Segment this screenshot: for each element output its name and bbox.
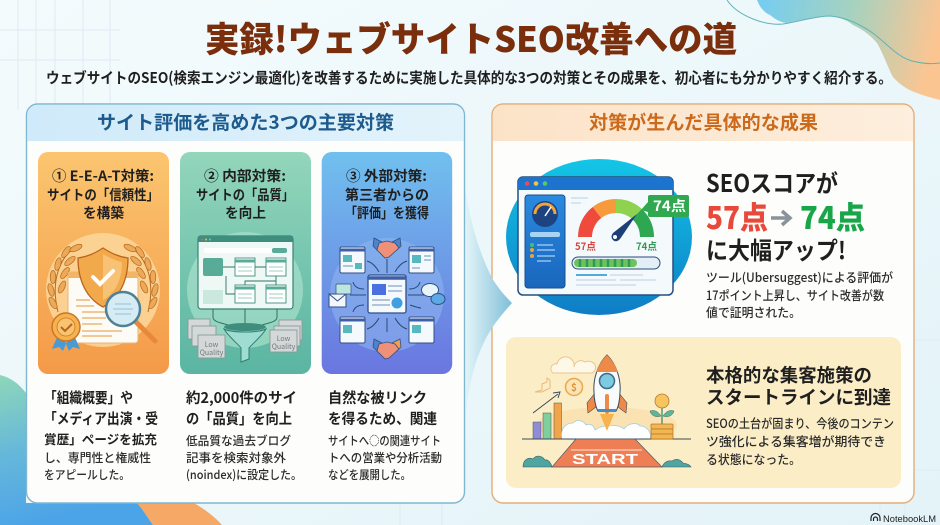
text: start line description: る状態になった。	[706, 449, 801, 468]
text: score result	[706, 164, 893, 321]
text: score result: 値で証明された。	[706, 302, 801, 321]
card: start line	[506, 337, 901, 488]
icon: site structure and funnel: Low	[205, 340, 219, 350]
icon: score dashboard: 74点	[653, 196, 686, 216]
panel heading: サイト評価を高めた3つの主要対策	[97, 108, 394, 135]
icon: rocket at start line: START	[572, 452, 638, 468]
heading: start line: スタートラインに到達	[706, 384, 891, 410]
icon: backlink network	[329, 238, 445, 359]
panel: results	[466, 104, 914, 503]
icon: shield, certificate and magnifier	[46, 233, 160, 351]
card 2 heading: サイトの「品質」	[196, 185, 294, 205]
text: card 1 description: 賞歴」ページを拡充	[44, 429, 157, 448]
text: score result: 17ポイント上昇し、サイト改善が数	[706, 285, 884, 304]
icon: site structure and funnel: Quality	[200, 348, 224, 358]
card 1 heading: ① E-E-A-T対策:	[52, 166, 154, 186]
icon: score dashboard: 57点	[575, 238, 596, 253]
icon: site structure and funnel: Quality	[272, 342, 296, 352]
panel heading: 対策が生んだ具体的な成果	[589, 108, 818, 135]
panel: measures	[26, 104, 464, 503]
card 1 heading: を構築	[83, 203, 124, 223]
arrow: from measures to results	[466, 190, 512, 412]
card 1 heading: サイトの「信頼性」	[47, 185, 159, 205]
text: card 2 description: の「品質」を向上	[186, 408, 292, 429]
text: card 3 description: などを展開した。	[328, 466, 411, 483]
card 3 heading: 「評価」を獲得	[345, 203, 429, 223]
text: card 1 description: 「組織概要」や	[44, 387, 133, 408]
heading: start line: 本格的な集客施策の	[706, 362, 872, 388]
card 2 heading	[196, 166, 294, 223]
text: card 2 description: 約2,000件のサイ	[186, 387, 297, 408]
text: card 2 description	[186, 387, 302, 483]
score change numbers	[706, 193, 865, 238]
icon: site structure and funnel	[187, 232, 303, 362]
icon: handshake top	[373, 238, 401, 258]
card 3 heading: ③ 外部対策:	[346, 166, 427, 186]
card 1: E-E-A-T	[38, 152, 169, 374]
card 2 heading: ② 内部対策:	[204, 166, 286, 186]
score change numbers: 57点	[706, 193, 768, 238]
card 3 heading	[345, 166, 429, 223]
icon: score dashboard: 74点	[636, 238, 657, 253]
text: card 3 description: を得るため、関連	[328, 408, 437, 429]
title: 実録!ウェブサイトSEO改善への道	[205, 12, 737, 63]
text: start line description	[706, 413, 894, 468]
text: card 2 description: 低品質な過去ブログ	[186, 432, 291, 449]
text: score result: ツール(Ubersuggest)による評価が	[706, 267, 893, 286]
card 3 heading: 第三者からの	[345, 185, 429, 205]
text: card 2 description: (noindex)に設定した。	[186, 466, 302, 483]
card 2: internal	[180, 152, 311, 374]
text: card 3 description	[328, 387, 442, 483]
text: start line description: SEOの土台が固まり、今後のコンテン	[706, 413, 894, 432]
card 2 heading: を向上	[225, 203, 266, 223]
card 1 heading	[47, 166, 159, 223]
card 3: external	[322, 152, 452, 374]
text: card 3 description: サイトへ◌の関連サイト	[328, 432, 441, 449]
icon: handshake bottom	[373, 339, 401, 359]
icon: site structure and funnel: Low	[277, 334, 291, 344]
text: score result: に大幅アップ!	[706, 231, 846, 266]
icon: rocket at start line: $	[571, 379, 577, 394]
score change numbers: 74点	[800, 193, 865, 238]
text: card 1 description	[44, 387, 158, 483]
text: card 1 description: 「メディア出演・受	[44, 408, 158, 429]
watermark: NotebookLM: NotebookLM	[883, 514, 936, 525]
text: card 2 description: 記事を検索対象外	[186, 449, 286, 466]
text: card 3 description: トへの営業や分析活動	[328, 449, 442, 466]
text: card 1 description: をアピールした。	[44, 466, 130, 483]
icon: rocket at start line	[522, 355, 691, 468]
heading: start line	[706, 362, 891, 410]
text: card 1 description: し、専門性と権威性	[44, 449, 151, 466]
text: start line description: ツ強化による集客増が期待でき	[706, 431, 886, 450]
text: card 3 description: 自然な被リンク	[328, 387, 427, 408]
result headline: SEOスコアが	[706, 164, 838, 199]
icon: score dashboard	[506, 159, 692, 315]
